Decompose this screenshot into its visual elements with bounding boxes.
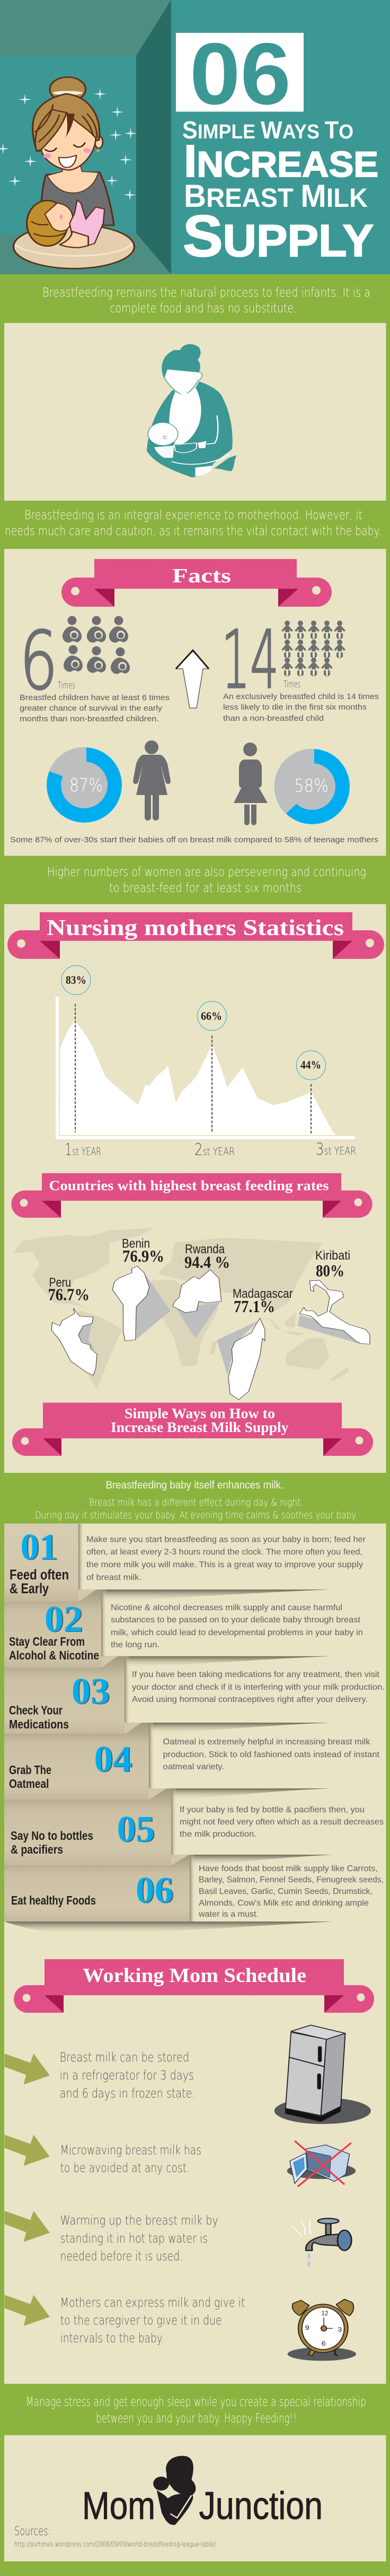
stat: 6 times: 6 <box>20 615 58 708</box>
schedule item: refrigerator: Breast milk can be stored <box>60 2050 189 2065</box>
step 04: oatmeal variety. <box>163 1762 224 1771</box>
icon: woman <box>133 740 171 820</box>
country: Madagascar <box>217 1287 292 1400</box>
donut: 58% <box>274 749 350 824</box>
heading ribbon: Countries: Countries with highest breast feeding rates <box>49 1178 329 1193</box>
country: Madagascar: 77.1% <box>234 1297 275 1316</box>
number badge: 06: 06 <box>190 25 291 123</box>
world map <box>12 1228 348 1390</box>
stat: 14 times: less likely to die in the first six months <box>223 703 367 712</box>
step 04 <box>4 1723 380 1800</box>
donut: 58%: 58% <box>294 775 329 797</box>
step 01 <box>4 1524 366 1602</box>
schedule item: hot tap: needed before it is used. <box>60 2249 183 2264</box>
donut: 87%: 87% <box>69 775 103 796</box>
title <box>182 116 378 269</box>
stat: 14 times: An exclusively breastfed child is 14 times <box>223 692 379 701</box>
heading ribbon: Facts <box>61 559 332 607</box>
step 02: the long run. <box>111 1640 159 1649</box>
step 05: 05 <box>117 1809 155 1850</box>
closing text: between you and your baby. Happy Feeding!! <box>96 2411 297 2426</box>
heading ribbon: Nursing mothers Statistics <box>7 912 384 959</box>
text: higher numbers <box>47 865 366 895</box>
schedule item: microwave: to be avoided at any cost. <box>60 2161 190 2176</box>
icon: mother and baby <box>147 344 236 477</box>
country: Rwanda: Rwanda <box>185 1242 225 1256</box>
heading ribbon: Facts: Facts <box>172 565 231 587</box>
icon: crossed-out microwave <box>287 2141 356 2187</box>
step 02: Stay Clear From <box>9 1635 85 1648</box>
sources: Sources: <box>14 2525 51 2538</box>
step 05: Say No to bottles <box>11 1829 93 1843</box>
closing text <box>26 2394 366 2426</box>
step 03: 03 <box>72 1671 110 1712</box>
illustration: mother nursing baby <box>0 77 137 268</box>
schedule arrows <box>4 2054 50 2326</box>
step 06: Have foods that boost milk supply like Carrots, <box>199 1864 378 1873</box>
schedule item: alarm clock: to the caregiver to give it in due <box>60 2313 222 2328</box>
step 02: milk, which could lead to developmental problems in your baby in <box>111 1628 363 1637</box>
text: breastfeeding baby enhances milk <box>35 1480 358 1521</box>
icon: clock: 12 <box>321 2310 329 2317</box>
schedule item: refrigerator <box>60 2025 371 2124</box>
step 01: 01 <box>20 1527 58 1568</box>
title: INCREASE <box>184 136 378 187</box>
step 05: & pacifiers <box>11 1843 63 1856</box>
step 01: of breast milk. <box>86 1573 141 1582</box>
callout: 44% <box>297 1051 325 1080</box>
text: higher numbers: to breast-feed for at least six months <box>109 880 302 895</box>
step 05: the milk production. <box>180 1830 256 1839</box>
schedule item: alarm clock: Mothers can express milk and give it <box>60 2295 245 2310</box>
schedule item: hot tap: Warming up the breast milk by <box>60 2213 218 2228</box>
text: breastfeeding baby enhances milk: Breast milk has a different effect during day & night. <box>89 1497 303 1508</box>
title: BREAST MILK <box>184 178 368 214</box>
step 01: & Early <box>10 1580 49 1596</box>
panel: logo and sources <box>4 2435 386 2562</box>
heading ribbon: Simple Ways: Simple Ways on How to <box>125 1405 275 1421</box>
step 06: Barley, Salmon, Fennel Seeds, Fenugreek seeds, <box>199 1875 384 1884</box>
step 04: Oatmeal <box>9 1777 49 1791</box>
step 02: Nicotine & alcohol decreases milk supply and cause harmful <box>111 1603 342 1612</box>
axis labels: 2st YEAR <box>194 1140 235 1159</box>
caption: 87% vs 58%: Some 87% of over-30s start their babies off on breast milk compared to 58% of teenage mothers <box>10 835 378 844</box>
step 04: 04 <box>94 1739 132 1780</box>
schedule item: alarm clock: intervals to the baby. <box>60 2330 164 2345</box>
step 01: Feed often <box>10 1567 69 1583</box>
icon: mother and baby: c <box>163 433 167 440</box>
stat: 14 times: Times <box>283 679 300 690</box>
step 02: substances to be passed on to your delicate baby through breast <box>111 1616 361 1625</box>
title: SIMPLE WAYS TO <box>182 116 353 144</box>
step 03: If you have been taking medications for any treatment, then visit <box>132 1670 380 1679</box>
schedule item: refrigerator: and 6 days in frozen state. <box>60 2086 195 2101</box>
panel: statistics and countries <box>4 904 386 1473</box>
step 02 <box>4 1590 363 1667</box>
icon: clock <box>288 2299 356 2361</box>
step 06: Basil Leaves, Garlic, Cumin Seeds, Drumstick, <box>199 1887 373 1896</box>
country: Kiribati <box>298 1248 370 1344</box>
step 04: Oatmeal is extremely helpful in increasing breast milk <box>163 1737 371 1747</box>
icon: teenage girl <box>234 743 268 825</box>
country: Madagascar: Madagascar <box>233 1287 292 1301</box>
schedule item: alarm clock <box>60 2295 356 2361</box>
intro text: complete food and has no substitute. <box>110 301 297 316</box>
step 06: 06 <box>136 1870 173 1911</box>
heading ribbon: Simple Ways: Increase Breast Milk Supply <box>111 1419 289 1435</box>
step 02: 02 <box>45 1599 83 1640</box>
country: Kiribati: 80% <box>316 1261 344 1280</box>
schedule item: microwave <box>60 2141 356 2187</box>
step 06: Eat healthy Foods <box>11 1893 96 1907</box>
text: breastfeeding baby enhances milk: Breastfeeding baby itself enhances milk. <box>106 1480 283 1491</box>
step 03: Check Your <box>9 1704 63 1717</box>
donut: 87% <box>47 747 122 823</box>
step 01: Make sure you start breastfeeding as soon as your baby is born; feed her <box>86 1535 366 1544</box>
stat: 6 times: Breastfed children have at least 6 times <box>20 693 170 702</box>
schedule item: microwave: Microwaving breast milk has <box>60 2143 201 2158</box>
callout: 83% <box>61 965 91 995</box>
panel: facts <box>4 549 386 856</box>
country: Benin: 76.9% <box>122 1246 164 1265</box>
icon: clock: 9 <box>305 2324 309 2332</box>
stat: 14 times: than a non-breastfed child <box>223 714 324 723</box>
step 02: Alcohol & Nicotine <box>9 1648 99 1662</box>
axis labels <box>65 1140 356 1159</box>
text: integral experience <box>5 508 382 538</box>
stat: 6 times <box>20 615 170 723</box>
schedule item: hot tap <box>60 2213 351 2267</box>
step 05: If your baby is fed by bottle & pacifiers then, you <box>180 1805 365 1814</box>
step 03: your doctor and check if it is interfering with your milk production. <box>132 1683 385 1692</box>
sources <box>14 2525 216 2549</box>
heading ribbon: Nursing mothers Statistics: Nursing mothers Statistics <box>47 916 344 940</box>
callout: 44%: 44% <box>300 1058 321 1071</box>
heading ribbon: Working Mom Schedule <box>14 1959 374 2013</box>
step 06: Almonds, Cow's Milk etc and drinking ample <box>199 1899 369 1908</box>
step 05 <box>4 1788 384 1865</box>
country: Kiribati: Kiribati <box>315 1248 350 1263</box>
step 06 <box>4 1855 384 1922</box>
area chart <box>56 965 356 1159</box>
step 04: production. Stick to old fashioned oats instead of instant <box>163 1750 380 1759</box>
callout: 83%: 83% <box>66 973 86 986</box>
country: Rwanda <box>173 1242 230 1338</box>
shadows under steps <box>4 1524 333 1934</box>
hero header panel <box>0 0 390 274</box>
axis labels: 1st YEAR <box>65 1140 101 1159</box>
heading ribbon: Simple Ways <box>12 1403 373 1456</box>
panel: simple ways and schedule <box>4 1524 386 2384</box>
step 04: Grab The <box>9 1763 51 1777</box>
icon: faucet <box>292 2219 351 2267</box>
icon: refrigerator <box>274 2025 371 2124</box>
stat: 6 times: months than non-breastfed children. <box>20 714 159 723</box>
logo: MomJunction: Junction <box>199 2484 323 2527</box>
step 01: the more milk you will make. This is a great way to improve your supply <box>86 1560 363 1569</box>
logo: MomJunction: Mom <box>82 2484 155 2527</box>
schedule item: refrigerator: in a refrigerator for 3 days <box>60 2068 194 2083</box>
heading ribbon: Working Mom Schedule: Working Mom Schedule <box>83 1964 306 1987</box>
country: Peru: Peru <box>49 1276 71 1290</box>
step 05: might not feed very often which as a result decreases <box>180 1818 384 1827</box>
icon: clock: 6 <box>321 2340 326 2347</box>
schedule item: hot tap: standing it in hot tap water is <box>60 2231 208 2246</box>
sources: http://ourtimes.wordpress.com/2008/09/09/world-breastfeeding-league-table/ <box>14 2541 216 2549</box>
icon: clock: 3 <box>338 2326 342 2333</box>
axis labels: 3st YEAR <box>316 1140 356 1159</box>
callout: 66%: 66% <box>201 1009 222 1023</box>
stat: 6 times: greater chance of survival in the early <box>20 704 163 713</box>
stat: 14 times <box>221 614 379 723</box>
country: Peru: 76.7% <box>48 1285 90 1304</box>
stat: 14 times: 14 <box>221 614 279 706</box>
step 06: water is a must. <box>198 1910 259 1919</box>
country: Benin <box>112 1237 171 1341</box>
country: Rwanda: 94.4 % <box>184 1253 230 1272</box>
stat: 6 times: Times <box>58 680 75 691</box>
step 01: often, at least every 2-3 hours round the clock. The more often you feed, <box>86 1548 362 1557</box>
panel: nursing mother icon <box>4 323 386 501</box>
country: Benin: Benin <box>122 1237 150 1251</box>
step 03 <box>4 1656 385 1734</box>
step 03: Medications <box>9 1717 69 1731</box>
countries <box>48 1237 370 1400</box>
heading ribbon: Countries <box>11 1173 373 1218</box>
intro text <box>42 285 370 316</box>
step 03: Avoid using hormonal contraceptives right after your delivery. <box>132 1695 368 1704</box>
title: SUPPLY <box>183 204 374 269</box>
callout: 66% <box>197 1001 227 1031</box>
country: Peru <box>48 1276 97 1375</box>
logo: MomJunction <box>82 2456 323 2527</box>
arrow: up <box>176 650 209 708</box>
